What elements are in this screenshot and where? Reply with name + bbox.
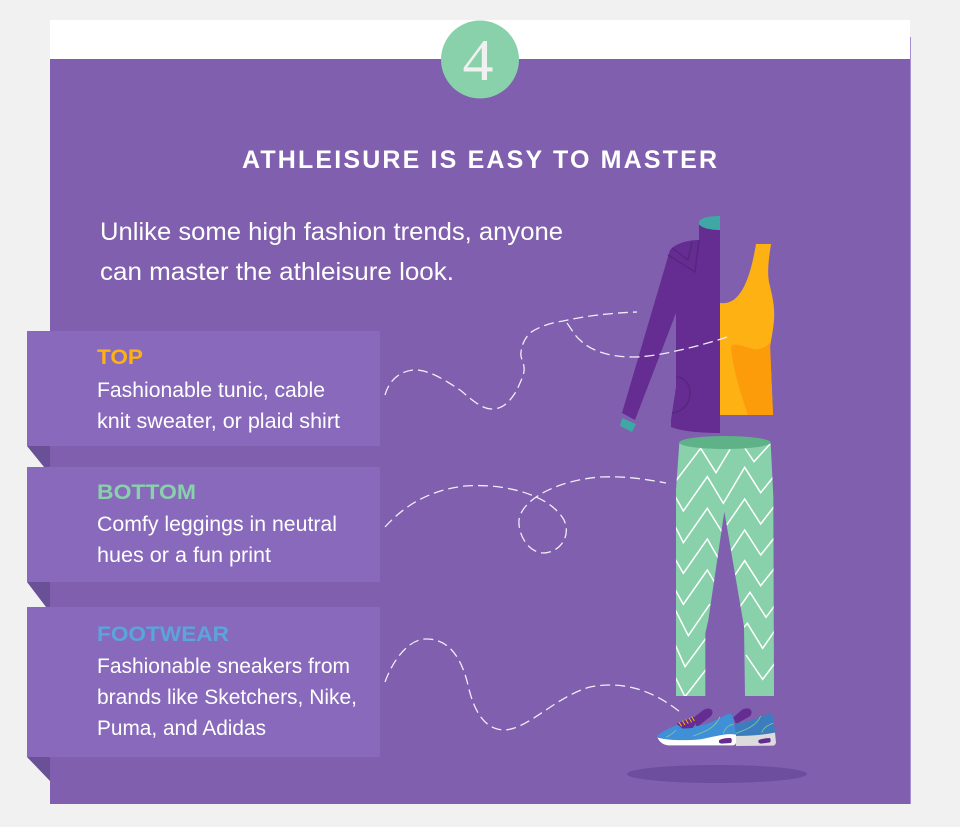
number badge: 4: [462, 27, 494, 93]
panel: top ribbon: knit sweater, or plaid shirt: [97, 410, 340, 433]
panel: footwear ribbon: brands like Sketchers, Nike,: [97, 686, 357, 709]
icon: sneakers: [657, 708, 776, 746]
panel: bottom ribbon: hues or a fun print: [97, 544, 271, 567]
intro text: can master the athleisure look.: [100, 258, 454, 286]
intro text: Unlike some high fashion trends, anyone: [100, 218, 563, 246]
white header band: [50, 20, 910, 59]
shadow under figure: [627, 765, 807, 783]
connector: footwear: [385, 639, 680, 730]
number badge: [441, 20, 519, 98]
title: ATHLEISURE IS EASY TO MASTER: [242, 146, 717, 174]
panel: footwear ribbon: [27, 607, 380, 781]
panel: top ribbon: TOP: [97, 346, 143, 369]
connector: top: [385, 312, 730, 409]
icon: tank top half: [720, 244, 774, 415]
connector: bottom: [385, 477, 666, 553]
panel: bottom ribbon: BOTTOM: [97, 481, 196, 504]
panel: footwear ribbon: FOOTWEAR: [97, 623, 229, 646]
panel: top ribbon: Fashionable tunic, cable: [97, 379, 325, 402]
panel: footwear ribbon: Fashionable sneakers from: [97, 655, 350, 678]
icon: leggings: [675, 436, 775, 697]
intro text: [100, 218, 563, 286]
icon: jacket half: [620, 216, 720, 433]
panel: bottom ribbon: Comfy leggings in neutral: [97, 513, 337, 536]
panel: top ribbon: [27, 331, 380, 467]
panel: bottom ribbon: [27, 467, 380, 607]
panel: footwear ribbon: Puma, and Adidas: [97, 717, 266, 740]
